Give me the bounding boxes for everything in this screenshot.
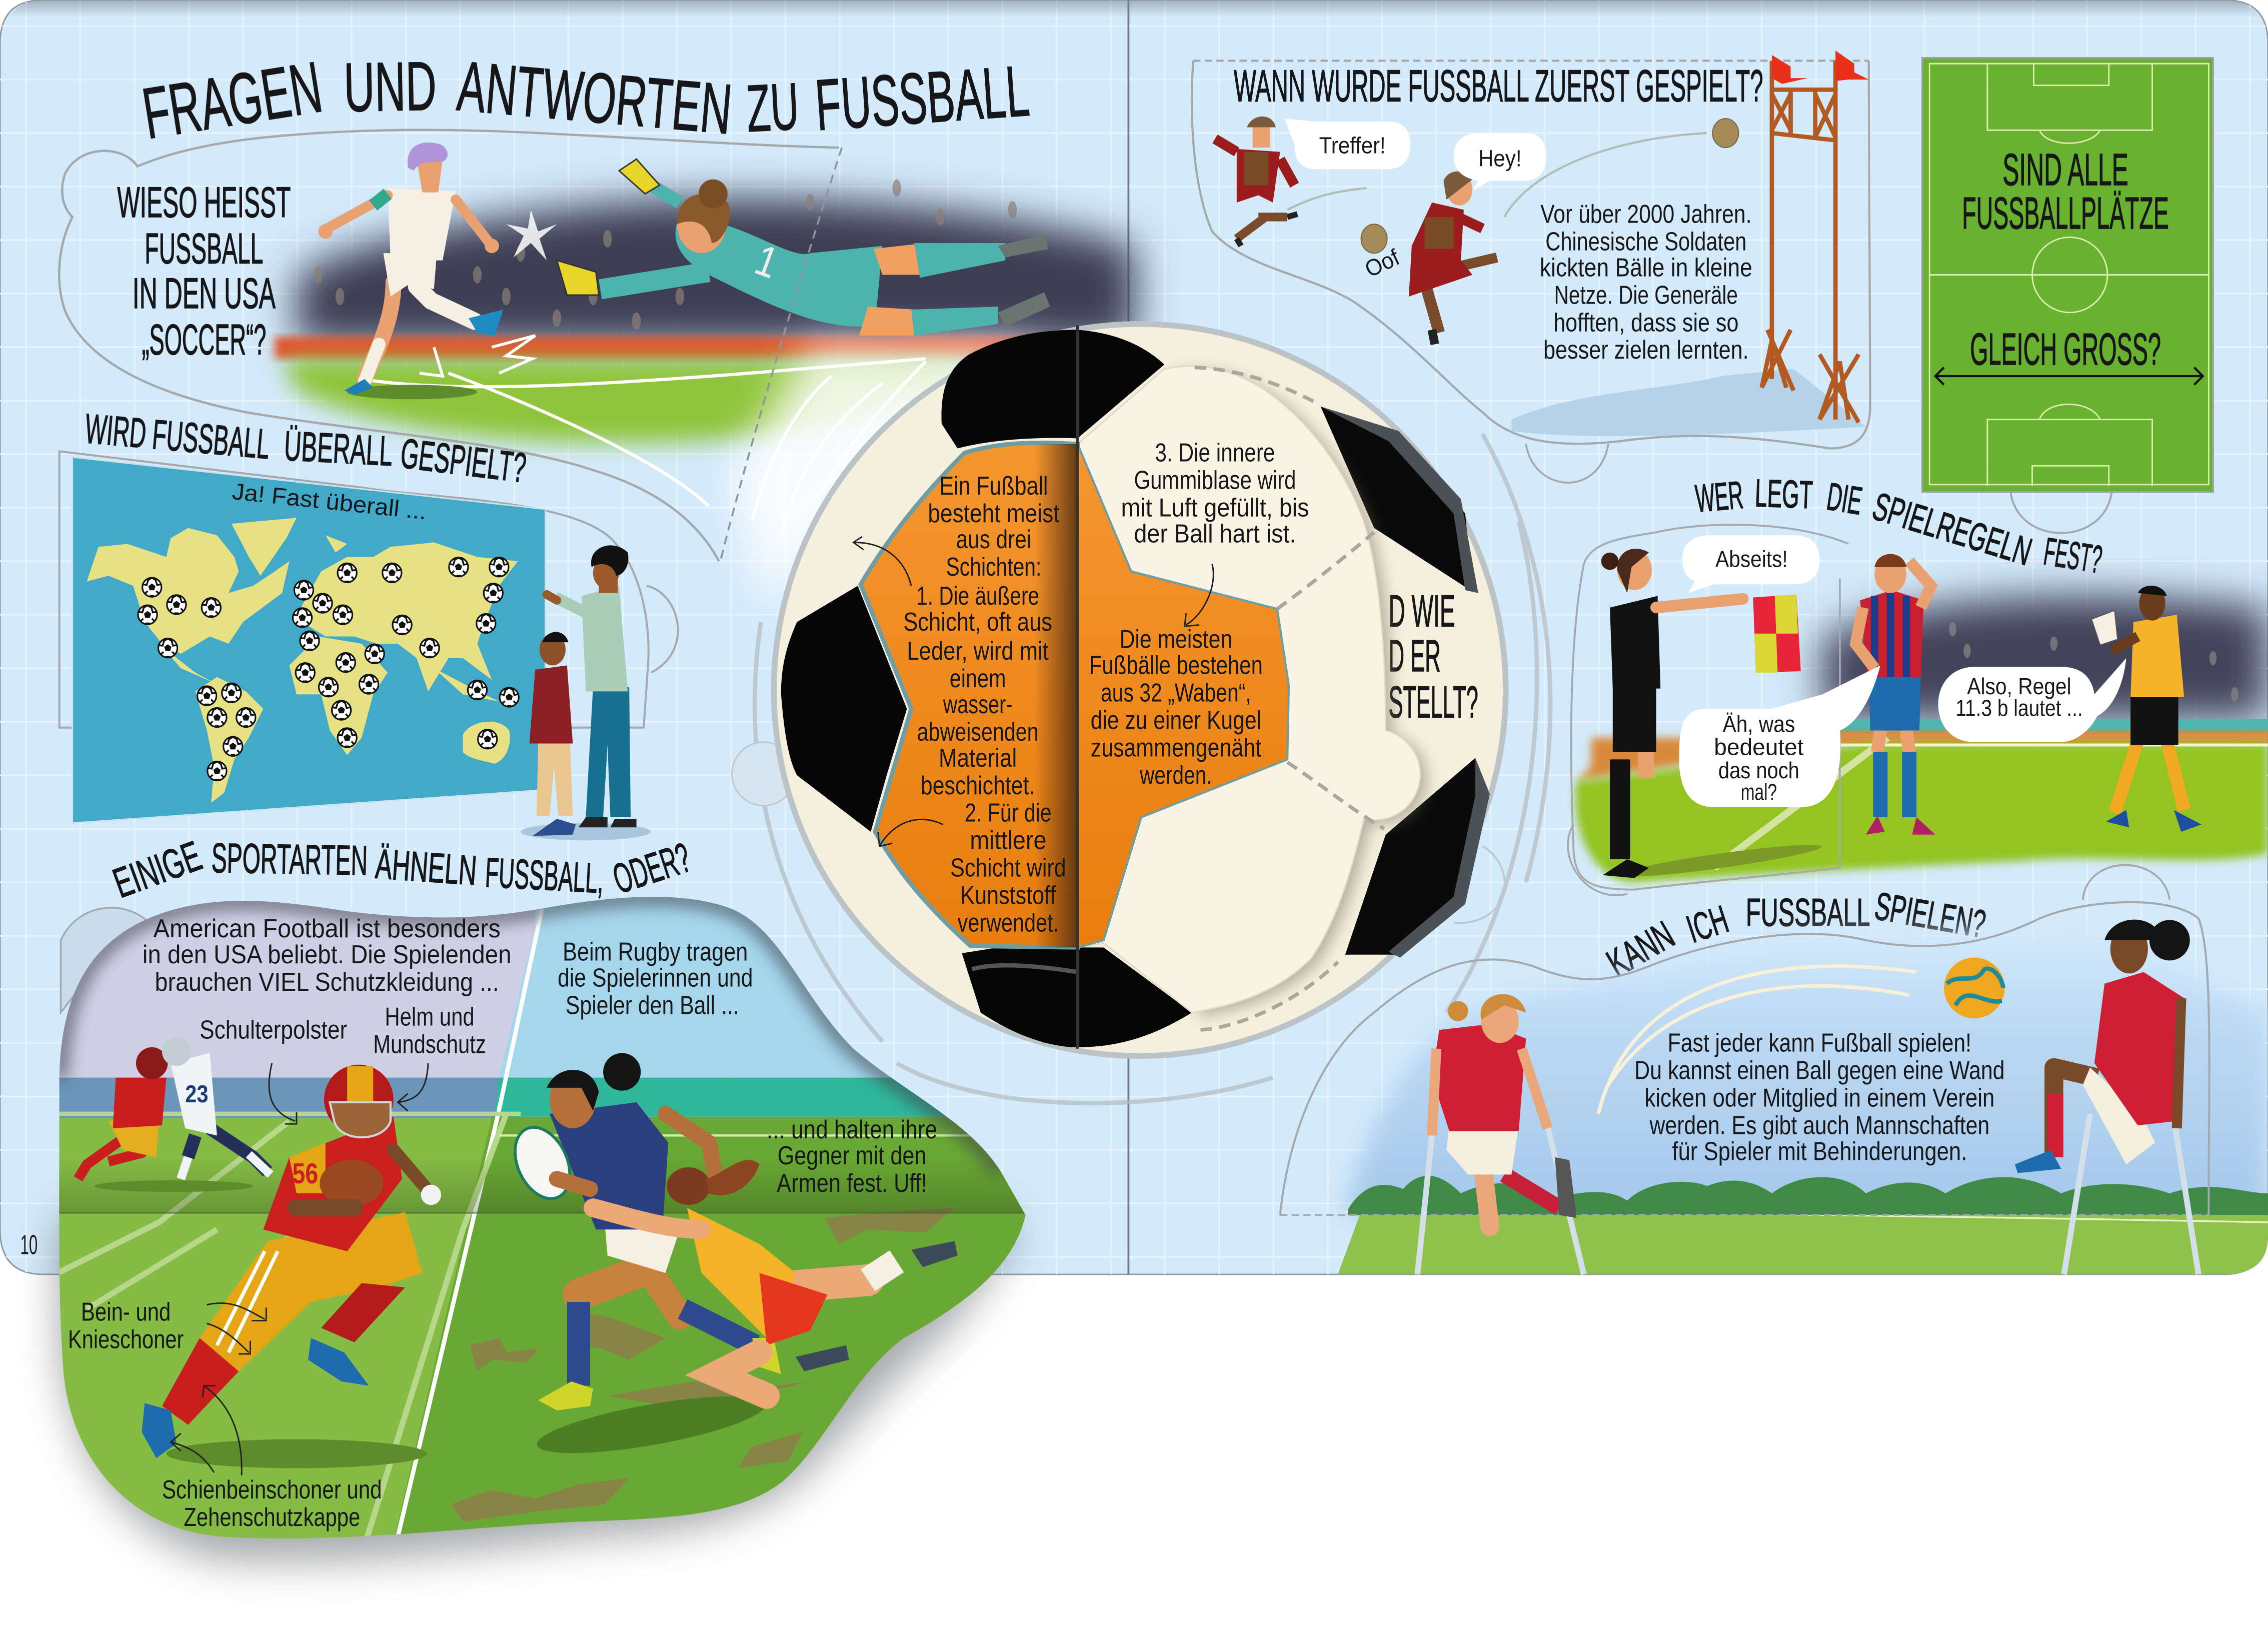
flap top inner shadow and fold	[59, 1168, 1024, 1212]
pitch question text	[1962, 145, 2169, 374]
hidden question text on inner ball	[1389, 586, 1478, 727]
page number 10: 10	[21, 1229, 38, 1260]
main title: FRAGEN	[138, 46, 327, 154]
heading: Kann ich Fussball spielen: SPIELEN?	[1871, 884, 1989, 946]
speech bubble: Hey: Hey!	[1478, 146, 1522, 172]
illustration: player right on crutches	[2015, 920, 2198, 1274]
ball text: layers: Schicht wird	[950, 854, 1066, 883]
illustration: official with rule book	[2091, 586, 2201, 832]
ball text: layers: Ein Fußball	[940, 472, 1048, 501]
history text: besser zielen lernten.	[1543, 336, 1749, 365]
flap text: American football: Bein- und	[81, 1298, 171, 1327]
outline: history panel	[1192, 61, 1870, 449]
play panel text	[1634, 1029, 2005, 1166]
heading: Kann ich Fussball spielen: ICH	[1681, 897, 1733, 951]
ball text: layers: besteht meist	[928, 499, 1060, 528]
ball text: panels: Fußbälle bestehen	[1089, 651, 1263, 680]
ball text: panels: zusammengenäht	[1091, 734, 1261, 763]
ball text: panels: Die meisten	[1120, 625, 1232, 654]
pitch markings	[1929, 64, 2208, 486]
main title	[138, 46, 1032, 154]
question text	[117, 178, 291, 364]
flap text: American football: Zehenschutzkappe	[184, 1503, 360, 1532]
ball text: layers: aus drei	[956, 525, 1031, 554]
panel: referee	[1568, 525, 2268, 895]
speech bubble: Treffer: Treffer!	[1319, 133, 1386, 159]
hidden question text on inner ball: D ER	[1389, 631, 1441, 681]
illustration: referee with flag	[1601, 549, 1801, 878]
panel: soccer question	[59, 130, 1135, 608]
speech bubble: Aeh was	[1679, 665, 1880, 807]
book spread background	[0, 0, 2268, 1274]
heading: Einige Sportarten	[107, 832, 696, 907]
flap text: American football: Mundschutz	[373, 1030, 486, 1059]
flap text: Rugby: die Spielerinnen und	[558, 963, 753, 992]
panel: everyone can play	[1280, 865, 2268, 1274]
flap text: American football: American Football ist besonders	[154, 914, 501, 943]
panel: world map	[60, 451, 678, 840]
ball text: layers	[903, 472, 1066, 938]
speech bubble: Hey	[1454, 133, 1546, 191]
continents	[87, 518, 518, 803]
ball path line	[1287, 133, 1707, 217]
question text: FUSSBALL	[145, 224, 263, 273]
orange inner layer	[861, 443, 1289, 947]
heading: Wer legt die Spielregeln fest: WER	[1693, 473, 1745, 521]
ball text: layers: verwendet.	[958, 909, 1059, 938]
illustration: American football player	[142, 1065, 441, 1468]
heading: Wird Fussball ueberall gespielt: WIRD FUSSBALL	[83, 405, 272, 468]
ball flight arcs	[1598, 966, 1916, 1114]
colourful ball	[1944, 958, 2005, 1018]
grass tufts	[451, 1208, 955, 1522]
flap text: American football: Schulterpolster	[200, 1016, 347, 1045]
heading: Wer legt die Spielregeln fest: FEST?	[2041, 529, 2105, 582]
ball text: inner bladder: der Ball hart ist.	[1134, 520, 1296, 549]
page number 11: 11	[2230, 1229, 2245, 1260]
right black patches	[1321, 407, 1490, 958]
ball text: layers: Material	[939, 744, 1017, 773]
ball text: layers: wasser-	[943, 690, 1013, 719]
ball text: layers: abweisenden	[917, 718, 1039, 747]
ball markers	[138, 558, 519, 781]
illustration: adult and child at map	[521, 545, 651, 840]
flap text: American football: in den USA beliebt. Die Spielenden	[143, 940, 511, 969]
main title: UND	[343, 47, 437, 127]
speech bubble: Abseits	[1682, 535, 1819, 593]
ball text: layers: Schicht, oft aus	[903, 608, 1052, 637]
heading: Wer legt die Spielregeln fest: SPIELREGELN	[1868, 484, 2037, 574]
heading: Wird Fussball ueberall gespielt	[83, 405, 529, 492]
illustration: kicking soldier	[1409, 172, 1497, 344]
pitch question text: SIND ALLE	[2002, 145, 2128, 195]
illustration: background football pair: 23	[185, 1080, 209, 1108]
label arrows	[171, 1063, 428, 1475]
tree line	[1348, 1176, 2268, 1215]
main title: FUSSBALL	[813, 50, 1032, 146]
question text: „SOCCER“?	[142, 316, 266, 364]
heading: Einige Sportarten: ODER?	[607, 834, 696, 902]
play panel text: für Spieler mit Behinderungen.	[1672, 1137, 1967, 1166]
left black patch	[781, 586, 907, 832]
flap text: American football: Helm und	[385, 1003, 475, 1032]
flap text: American football	[68, 914, 511, 1532]
flap text: Rugby: ... und halten ihre	[767, 1115, 937, 1144]
illustration: stadium and pitch background	[275, 180, 1135, 608]
flap text: American football: Schienbeinschoner und	[162, 1475, 382, 1504]
football cutaway	[771, 321, 1509, 1059]
history text: Vor über 2000 Jahren.	[1540, 200, 1751, 229]
ball text: layers: beschichtet.	[921, 771, 1035, 800]
speech bubble: Also Regel: Also, Regel	[1967, 673, 2071, 699]
flap text: Rugby: Spieler den Ball ...	[566, 991, 739, 1020]
illustration: American football player: 56	[292, 1158, 318, 1190]
speech bubble: Aeh was: das noch	[1718, 757, 1799, 783]
map caption: Ja! Fast überall ...	[231, 478, 428, 525]
flap shadow	[59, 1215, 1013, 1562]
ball text: layers: einem	[950, 664, 1006, 693]
top black patch	[941, 330, 1164, 449]
heading: Wer legt die Spielregeln fest: LEGT	[1754, 471, 1813, 517]
illustration: goal with flags	[1762, 61, 1858, 423]
ball text: inner bladder	[1121, 439, 1309, 549]
flap text: Rugby: Beim Rugby tragen	[563, 937, 748, 966]
illustration: soldier with Treffer	[1215, 117, 1297, 246]
question text: WIESO HEISST	[117, 178, 291, 227]
outer ball	[771, 321, 1509, 1059]
flap shadow on ball	[1172, 371, 1427, 1017]
panel: sports flap	[44, 882, 1056, 1555]
arrows on ball	[853, 537, 1213, 846]
stadium and field	[1575, 596, 2268, 882]
bottom black patch	[962, 947, 1192, 1047]
illustration: diving goalkeeper: 1	[749, 235, 785, 288]
speech bubble: Also Regel: 11.3 b lautet ...	[1955, 695, 2083, 721]
dashed fold line	[720, 148, 842, 561]
question text: IN DEN USA	[133, 269, 276, 318]
main title: ZU	[745, 70, 801, 146]
flap text: American football: brauchen VIEL Schutzkleidung ...	[155, 968, 499, 997]
shadow under goal	[1511, 369, 1866, 436]
ball text: layers: Kunststoff	[960, 881, 1056, 910]
heading: Wird Fussball ueberall gespielt: GESPIELT?	[398, 430, 529, 492]
ball text: inner bladder: 3. Die innere	[1155, 439, 1275, 468]
flap text: Rugby	[558, 937, 937, 1198]
hidden question text on inner ball: D WIE	[1389, 586, 1455, 636]
field	[1338, 1215, 2268, 1274]
play panel text: Du kannst einen Ball gegen eine Wand	[1634, 1056, 2005, 1085]
pitch	[1922, 58, 2213, 492]
speech bubble: Also Regel	[1938, 658, 2126, 742]
illustration: diving goalkeeper	[557, 159, 1050, 336]
history text: hofften, dass sie so	[1553, 308, 1738, 337]
panel: pitch sizes	[1922, 58, 2213, 533]
ball text: panels: werden.	[1139, 761, 1212, 790]
outline: play panel	[1280, 902, 2209, 1215]
history text: kickten Bälle in kleine	[1540, 253, 1752, 282]
speech bubble: Abseits: Abseits!	[1715, 546, 1788, 572]
illustration: background football pair	[78, 1037, 271, 1192]
ball text: panels: aus 32 „Waben“,	[1101, 679, 1251, 708]
motion lines behind ball	[732, 434, 1550, 1103]
ball text: layers: Schichten:	[946, 553, 1041, 582]
ball text: panels: die zu einer Kugel	[1091, 706, 1261, 735]
speech bubble: Aeh was: Äh, was	[1723, 711, 1795, 737]
heading: Kann ich Fussball spielen	[1599, 884, 1989, 985]
football cutaway: STELLT?	[1389, 677, 1478, 727]
flap artwork	[44, 882, 1056, 1555]
sky background	[1345, 926, 2268, 1215]
illustration: player left on crutches	[1417, 994, 1584, 1274]
Oof label: Oof	[1361, 244, 1403, 282]
play panel text: werden. Es gibt auch Mannschaften	[1649, 1111, 1989, 1140]
illustration: striker in white kit	[318, 143, 504, 395]
ear behind flap	[61, 908, 152, 1012]
spine over ball	[1076, 326, 1079, 1049]
flags	[1772, 51, 1869, 84]
flap text: Rugby: Gegner mit den	[778, 1141, 926, 1170]
heading: Einige Sportarten: ÄHNELN	[374, 840, 478, 894]
heading: Wer legt die Spielregeln fest	[1693, 471, 2105, 582]
ball text: layers: 1. Die äußere	[916, 582, 1039, 611]
outline: soccer panel	[59, 130, 839, 561]
heading: Kann ich Fussball spielen: FUSSBALL	[1746, 890, 1870, 934]
width arrow	[1935, 368, 2203, 385]
ball text: panels	[1089, 625, 1263, 790]
speech bubble: Aeh was: bedeutet	[1714, 734, 1804, 760]
main title: ANTWORTEN	[454, 47, 735, 150]
flap: stitched ball panel	[1078, 366, 1420, 1030]
heading: Wer legt die Spielregeln fest: DIE	[1824, 474, 1865, 523]
flap text: American football: Knieschoner	[68, 1325, 184, 1354]
illustration: confused player	[1856, 554, 1935, 835]
history text: Chinesische Soldaten	[1545, 227, 1746, 256]
flap text: Rugby: Armen fest. Uff!	[777, 1169, 927, 1198]
heading: Kann ich Fussball spielen: KANN	[1599, 912, 1681, 985]
play panel text: kicken oder Mitglied in einem Verein	[1644, 1083, 1994, 1112]
history text: Netze. Die Generäle	[1554, 281, 1738, 310]
heading: Einige Sportarten: EINIGE	[107, 832, 208, 907]
panel: history of football	[1192, 51, 1870, 483]
history text	[1540, 200, 1752, 365]
speech bubble: Treffer	[1284, 119, 1410, 169]
ball text: inner bladder: Gummiblase wird	[1134, 466, 1296, 495]
outline: map panel	[60, 451, 649, 728]
ball text: layers: Leder, wird mit	[907, 637, 1049, 666]
ball text: layers: mittlere	[970, 826, 1047, 855]
heading: Einige Sportarten: FUSSBALL,	[484, 849, 605, 902]
heading: Einige Sportarten: SPORTARTEN	[211, 834, 368, 884]
outline: referee panel	[1571, 525, 1848, 890]
ball text: layers: 2. Für die	[965, 799, 1052, 828]
ball text: inner bladder: mit Luft gefüllt, bis	[1121, 493, 1309, 522]
illustration: rugby players	[504, 1053, 958, 1465]
speech bubble: Aeh was: mal?	[1741, 779, 1777, 805]
heading: Wird Fussball ueberall gespielt: ÜBERALL	[283, 422, 394, 475]
map background	[73, 457, 545, 823]
leather balls	[1361, 119, 1738, 253]
play panel text: Fast jeder kann Fußball spielen!	[1668, 1029, 1971, 1058]
heading: Wann wurde Fussball zuerst gespielt: WANN WURDE FUSSBALL ZUERST GESPIELT?	[1234, 61, 1763, 111]
